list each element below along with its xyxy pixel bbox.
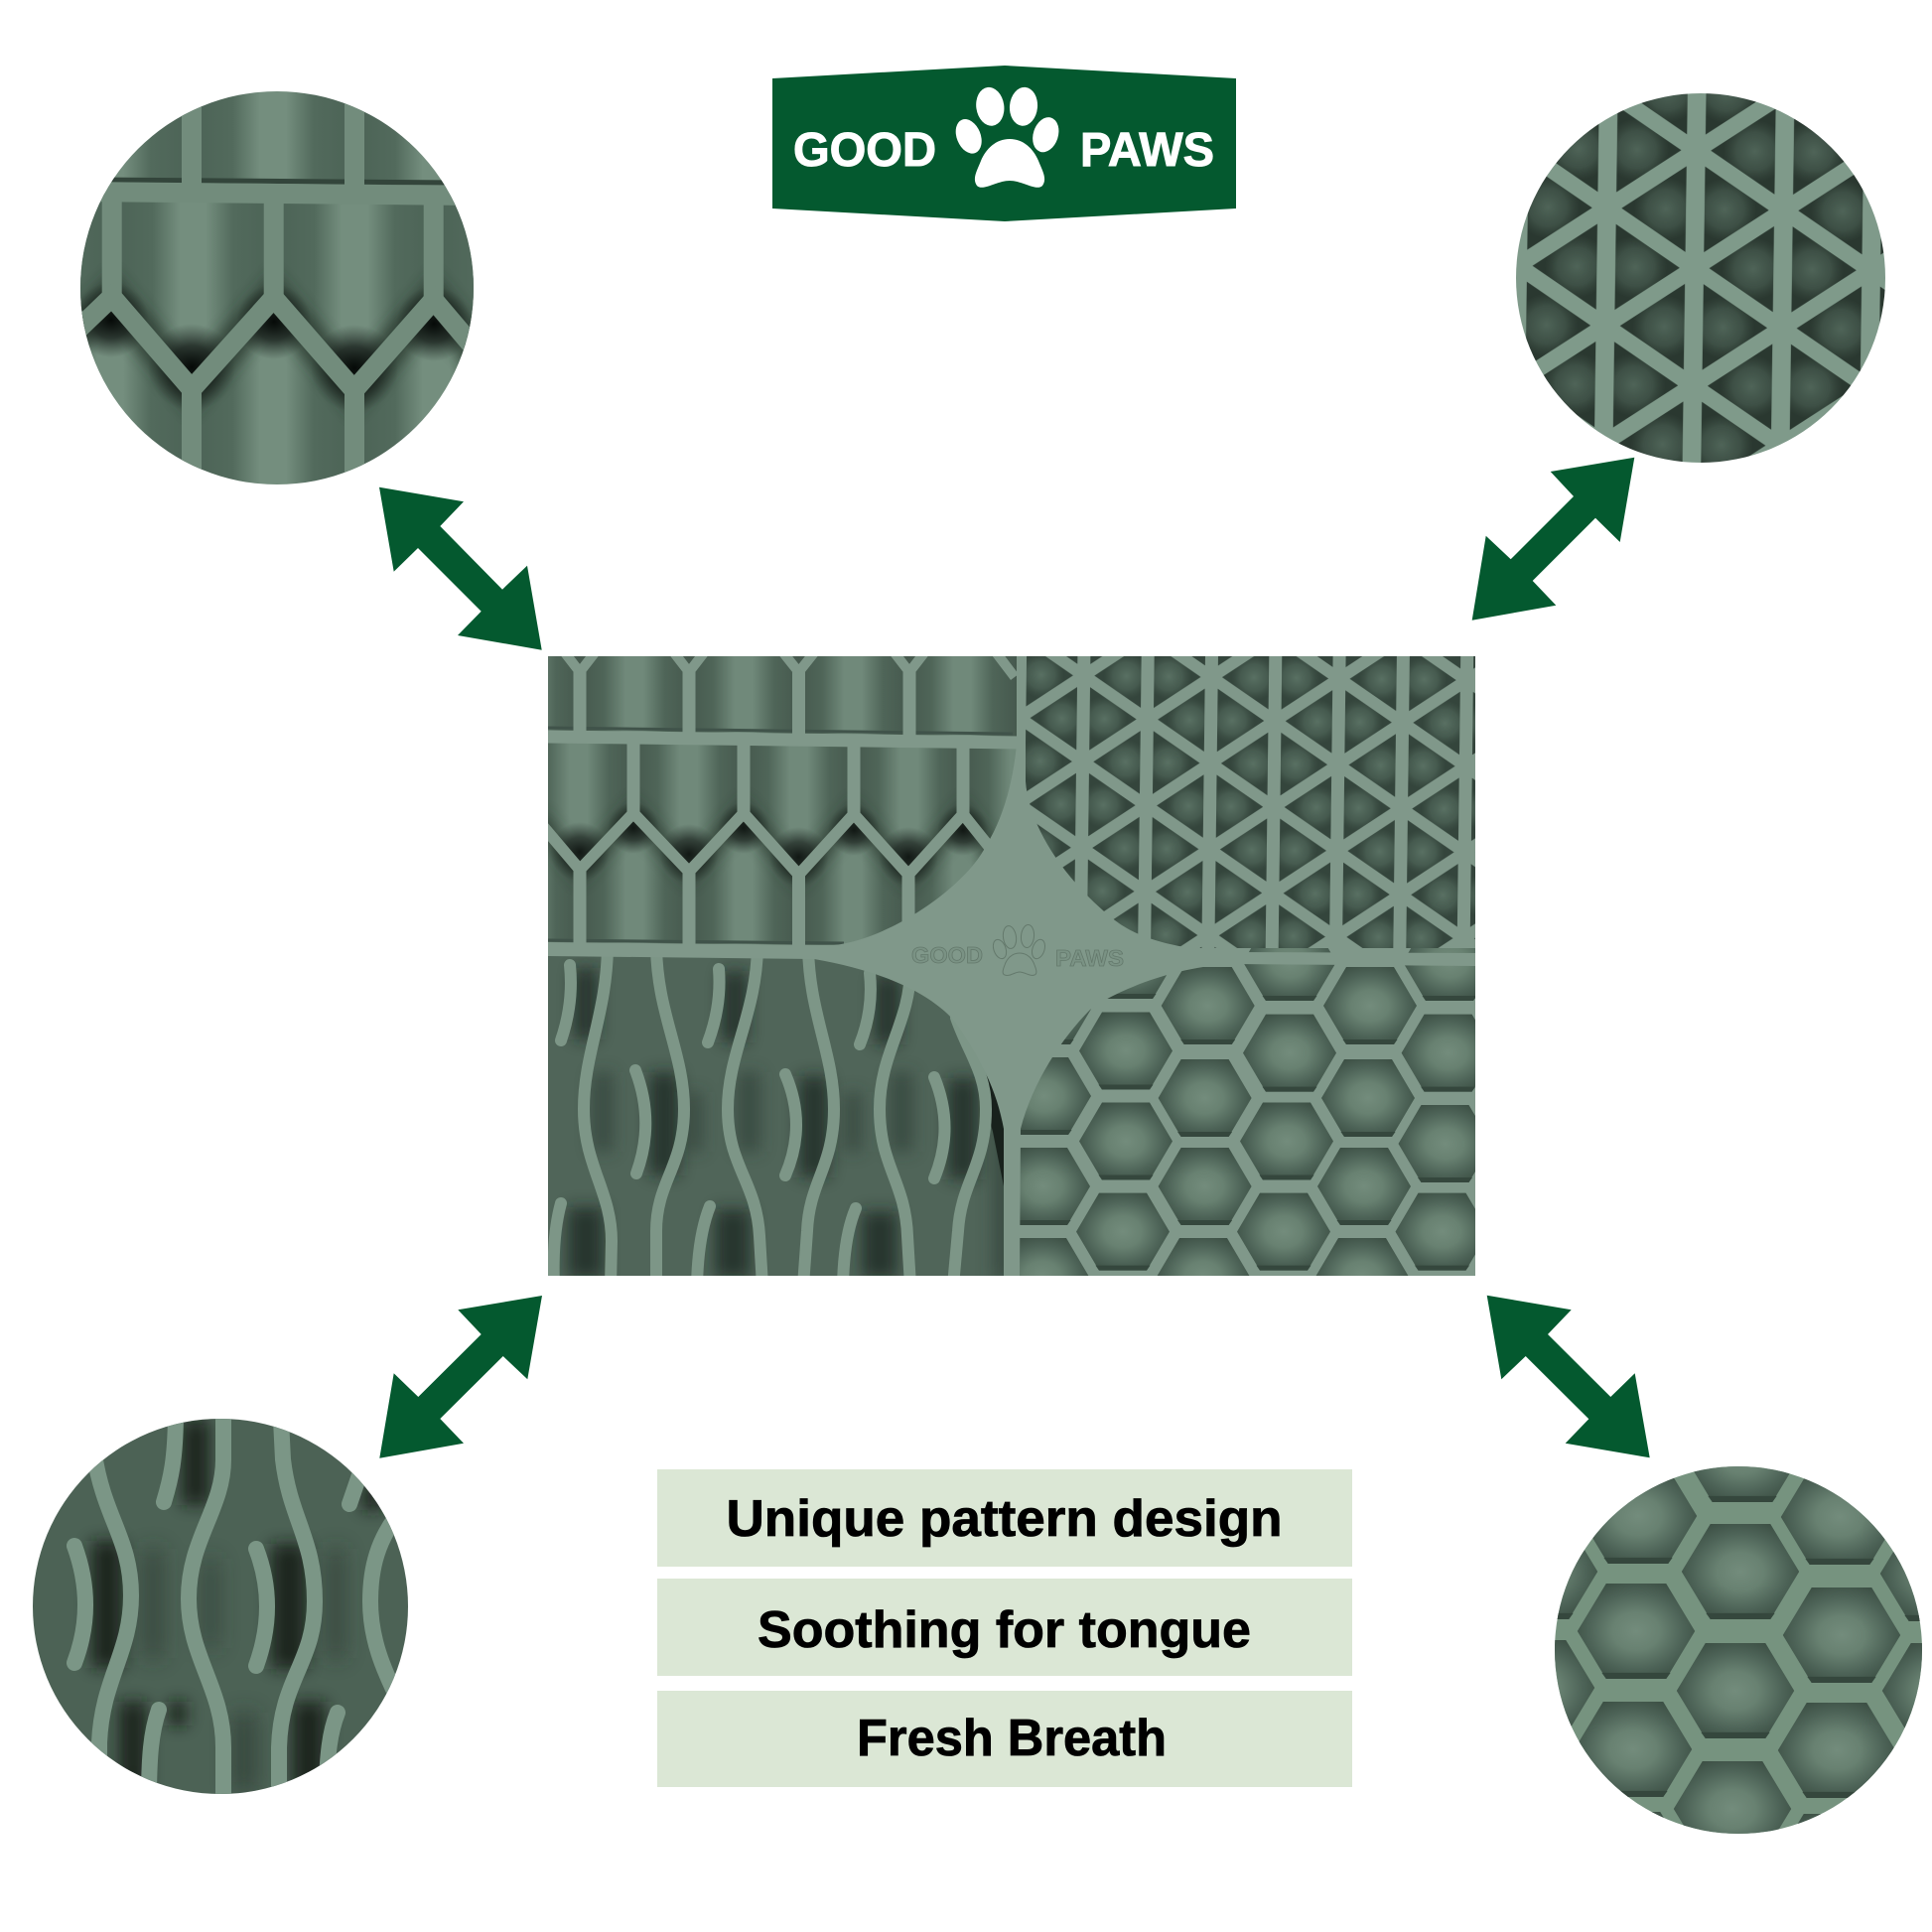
label: Fresh Breath: Fresh Breath xyxy=(857,1710,1167,1767)
quadrant: wave pattern xyxy=(548,943,1015,1286)
label: Soothing for tongue xyxy=(657,1579,1352,1676)
embossed paw xyxy=(991,924,1047,975)
circle: picket pattern close-up xyxy=(80,91,474,484)
logo: Good Paws badge xyxy=(772,66,1236,221)
label: Soothing for tongue: Soothing for tongue xyxy=(758,1601,1251,1659)
circle: triangle pattern close-up xyxy=(1509,89,1896,467)
icon: paw print xyxy=(951,85,1063,188)
quadrant: triangle pattern xyxy=(1023,656,1475,954)
label: Unique pattern design xyxy=(657,1469,1352,1567)
quadrant: honeycomb pattern xyxy=(1020,948,1475,1276)
arrow: bottom-right double arrow xyxy=(1487,1296,1650,1457)
star-shaped centre of the mat with embossed logo xyxy=(548,656,1475,1276)
circle: honeycomb pattern close-up xyxy=(1555,1466,1922,1834)
quadrant: picket pattern xyxy=(536,650,1025,954)
embossed brand text: GOOD: GOOD xyxy=(911,942,983,968)
logo: Good Paws badge: PAWS xyxy=(1080,124,1214,177)
label: Fresh Breath xyxy=(657,1691,1352,1787)
circle: wave pattern close-up xyxy=(30,1410,412,1802)
logo: Good Paws badge: GOOD xyxy=(793,124,936,177)
embossed brand text: PAWS: PAWS xyxy=(1055,945,1124,971)
arrow: top-right double arrow xyxy=(1472,458,1634,621)
panel: central lick mat xyxy=(548,656,1475,1276)
arrow: top-left double arrow xyxy=(379,487,542,650)
label: Unique pattern design: Unique pattern design xyxy=(727,1490,1283,1548)
arrow: bottom-left double arrow xyxy=(379,1296,542,1458)
